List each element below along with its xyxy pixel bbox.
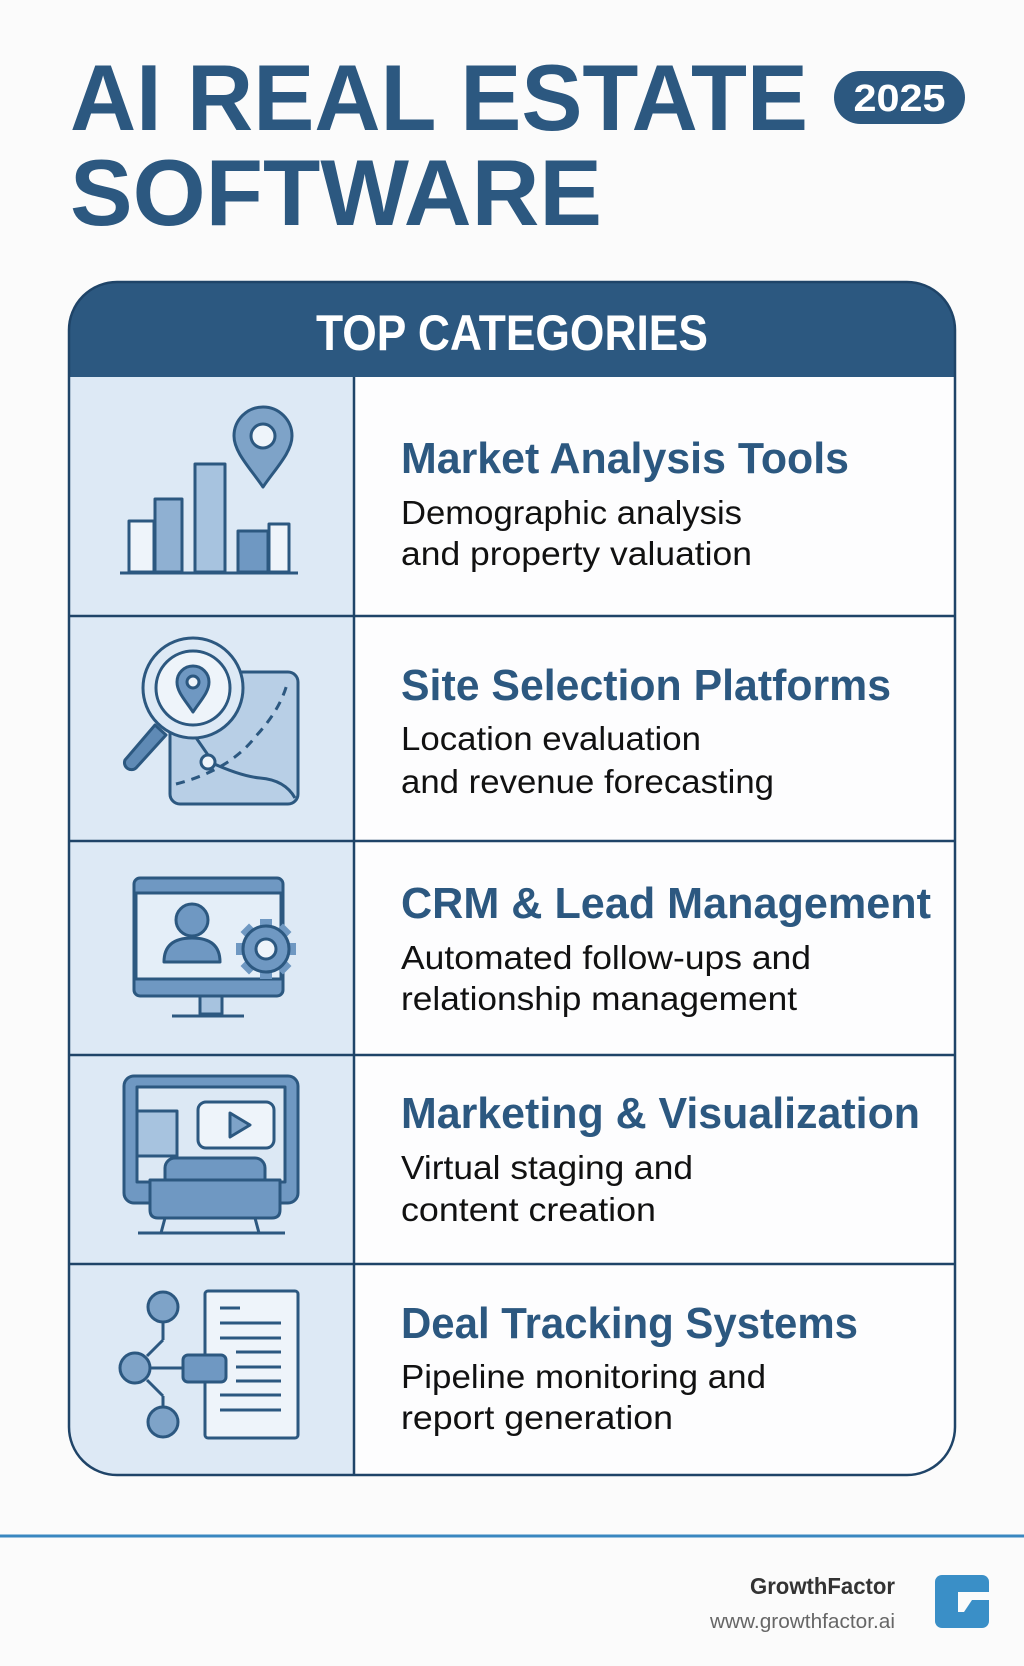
text: market analysis tools: Demographic analysis	[401, 494, 742, 531]
text: marketing & visualization	[401, 1089, 920, 1228]
title	[70, 45, 808, 245]
text: CRM & lead management: CRM & Lead Management	[401, 879, 931, 928]
text: deal tracking systems: Deal Tracking Systems	[401, 1299, 858, 1348]
text: CRM & lead management	[401, 879, 931, 1017]
text: market analysis tools: Market Analysis Tools	[401, 434, 849, 483]
title: SOFTWARE	[70, 140, 602, 245]
icon: deal tracking flow	[120, 1291, 298, 1438]
text: site selection platforms: Site Selection Platforms	[401, 661, 891, 710]
badge: 2025: 2025	[854, 78, 946, 120]
footer brand text	[709, 1573, 895, 1633]
panel heading: TOP CATEGORIES	[316, 305, 708, 361]
panel: top categories	[69, 282, 955, 1475]
text: marketing & visualization: Marketing & Visualization	[401, 1089, 920, 1138]
text: CRM & lead management: Automated follow-ups and	[401, 939, 811, 976]
text: deal tracking systems	[401, 1299, 858, 1436]
icon: bar chart with pin	[120, 407, 298, 573]
badge: 2025	[834, 71, 965, 124]
text: site selection platforms	[401, 661, 891, 800]
text: deal tracking systems: report generation	[401, 1399, 673, 1436]
footer brand text: GrowthFactor	[750, 1573, 895, 1599]
icon: TV with couch	[124, 1076, 298, 1233]
text: marketing & visualization: Virtual staging and	[401, 1149, 693, 1186]
icon: GrowthFactor logo	[935, 1575, 989, 1628]
icon: CRM monitor	[134, 878, 296, 1016]
text: market analysis tools	[401, 434, 849, 572]
text: CRM & lead management: relationship management	[401, 980, 797, 1017]
text: market analysis tools: and property valuation	[401, 535, 752, 572]
title: AI REAL ESTATE	[70, 45, 808, 150]
text: marketing & visualization: content creation	[401, 1191, 656, 1228]
text: site selection platforms: Location evaluation	[401, 720, 701, 757]
text: site selection platforms: and revenue forecasting	[401, 763, 774, 800]
footer brand text: www.growthfactor.ai	[709, 1611, 895, 1633]
text: deal tracking systems: Pipeline monitoring and	[401, 1358, 766, 1395]
icon: map with magnifier	[124, 638, 298, 804]
